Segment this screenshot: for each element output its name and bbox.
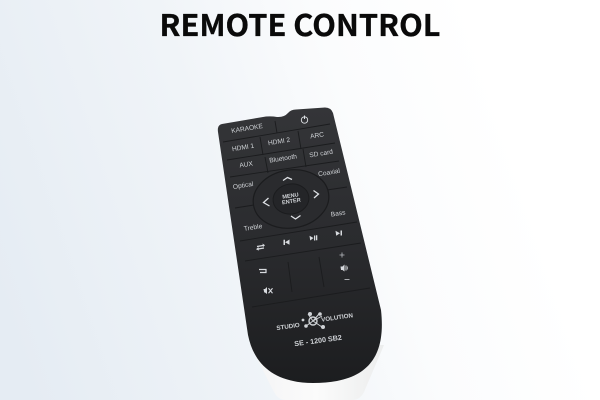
icon: mute [264, 287, 273, 294]
button labels: HDMI 2 [268, 137, 291, 147]
icon: previous [284, 240, 290, 245]
volume plus [340, 252, 344, 258]
brand logo: STUDIO [276, 322, 300, 332]
button labels: ARC [310, 131, 325, 141]
volume minus [344, 278, 350, 280]
button labels: Coaxial [318, 168, 341, 178]
icon: play pause [310, 235, 317, 240]
button labels: Optical [232, 181, 254, 191]
icon: next [336, 230, 342, 236]
brand logo: VOLUTION [321, 312, 354, 324]
brand logo [276, 312, 354, 332]
button grid lines [223, 121, 370, 307]
remote body [218, 108, 382, 383]
jog wheel [249, 164, 333, 234]
button labels: HDMI 1 [232, 143, 255, 153]
jog wheel: ENTER [282, 198, 301, 206]
button labels: AUX [239, 160, 254, 170]
menu enter label: MENU [282, 192, 299, 201]
direction arrows [264, 178, 318, 219]
icon: return [259, 270, 266, 272]
model number: SE - 1200 SB2 [294, 333, 342, 348]
icon: power [301, 116, 308, 123]
title: REMOTE CONTROL [160, 1, 440, 45]
button labels: SD card [309, 149, 334, 159]
icon: repeat [256, 244, 265, 251]
button labels: Bluetooth [269, 153, 298, 165]
white remote base [250, 345, 384, 400]
button labels: Bass [330, 209, 347, 219]
button labels: KARAOKE [231, 123, 264, 135]
remote control [218, 108, 384, 400]
button labels [231, 123, 347, 233]
button labels: Treble [243, 223, 263, 233]
icon: volume [340, 264, 348, 272]
